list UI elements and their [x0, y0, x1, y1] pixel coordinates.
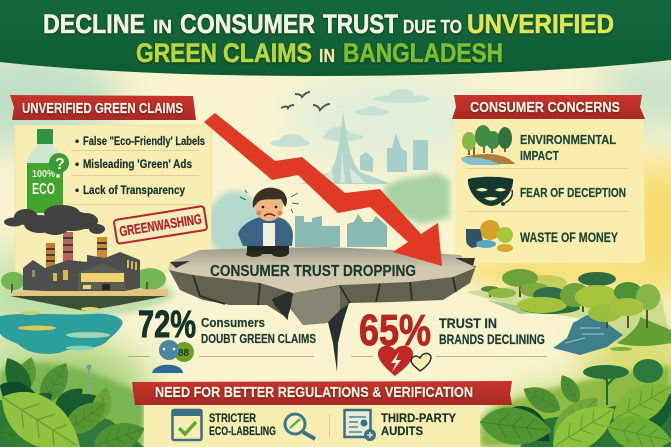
worried consumer figure [238, 188, 299, 257]
text: stricter eco-labeling [209, 411, 276, 438]
foliage right [478, 359, 671, 447]
stamp: greenwashing [114, 206, 207, 244]
title band: UNVERIFIED [467, 9, 614, 39]
panel: unverified green claims [0, 95, 212, 354]
text: fear of deception: FEAR OF DECEPTION [520, 185, 626, 200]
icon: doubting person [152, 340, 194, 373]
stat: 65 percent: TRUST IN [439, 315, 497, 331]
city skyline and birds [207, 89, 450, 259]
icon: eco bottle [27, 129, 69, 213]
stamp: greenwashing: GREENWASHING [118, 211, 203, 239]
polluted water [0, 307, 123, 354]
title band: DECLINE [43, 9, 145, 39]
text: third-party audits: THIRD-PARTY [381, 411, 456, 425]
falling red arrow [204, 113, 442, 266]
icon: waste of money [466, 220, 513, 252]
text: stricter eco-labeling: STRICTER [209, 411, 256, 425]
title band: GREEN [136, 38, 217, 68]
claims list: • [75, 157, 79, 171]
claims list [71, 134, 205, 204]
title band: DUE TO [403, 17, 462, 37]
title band: BANGLADESH [343, 38, 503, 68]
text: third-party audits [381, 411, 456, 438]
foliage left [0, 353, 149, 447]
icon: forest island [461, 125, 515, 165]
cliff label: CONSUMER TRUST DROPPING [210, 263, 416, 280]
stat: 65 percent: BRANDS DECLINING [439, 332, 545, 347]
panel: consumer concerns [452, 95, 645, 263]
claims banner: UNVERIFIED GREEN CLAIMS [22, 101, 183, 117]
title band: TRUST [323, 9, 398, 39]
icon: eco bottle: ECO [32, 181, 55, 198]
concerns banner [452, 95, 645, 119]
icon: doubting person: 88 [178, 348, 190, 359]
claims list: Lack of Transparency [83, 183, 185, 197]
claims list: False "Eco-Friendly' Labels [83, 134, 205, 148]
text: third-party audits: AUDITS [381, 424, 423, 438]
regulations banner [132, 381, 512, 405]
factory smoke [4, 205, 105, 235]
title band [0, 0, 671, 76]
stat: 72 percent: Consumers [201, 315, 265, 330]
concerns banner: CONSUMER CONCERNS [470, 100, 620, 116]
claims list: • [75, 134, 79, 148]
claims banner [10, 95, 196, 120]
title band: IN [153, 17, 172, 37]
panel: need for better regulations [132, 381, 512, 447]
text: stricter eco-labeling: ECO-LABELING [209, 424, 276, 438]
stat: 65 percent: 65% [359, 306, 431, 355]
regulations banner: NEED FOR BETTER REGULATIONS & VERIFICATION [155, 385, 473, 401]
claims list: • [75, 183, 79, 197]
claims list: Misleading 'Green' Ads [83, 157, 192, 171]
stat: 65 percent [351, 306, 547, 376]
title band: CLAIMS [223, 38, 312, 68]
text: environmental impact [520, 132, 616, 163]
stat: 72 percent: DOUBT GREEN CLAIMS [201, 331, 316, 346]
factory scene [0, 232, 175, 318]
text: environmental impact: IMPACT [520, 148, 559, 163]
central forest and river scene [467, 269, 671, 355]
cracked cliff: consumer trust dropping [168, 247, 476, 372]
icon: eco bottle: ? [55, 156, 65, 173]
claims panel paper [15, 125, 212, 272]
regulations paper [144, 405, 480, 447]
text: waste of money: WASTE OF MONEY [520, 230, 618, 245]
title band: IN [319, 46, 335, 66]
icon: eco bottle: 100% [32, 168, 56, 180]
text: environmental impact: ENVIRONMENTAL [520, 132, 616, 147]
icon: eco-label checkbox [172, 410, 202, 440]
icon: audit document [344, 410, 376, 441]
concerns panel paper [455, 119, 645, 263]
title band: CONSUMER [180, 9, 315, 39]
icon: magnifier [285, 414, 315, 439]
icon: broken heart [378, 346, 431, 376]
stat: 72 percent: 72% [138, 304, 196, 346]
stat: 72 percent [128, 304, 316, 373]
icon: deception mask [468, 177, 513, 206]
